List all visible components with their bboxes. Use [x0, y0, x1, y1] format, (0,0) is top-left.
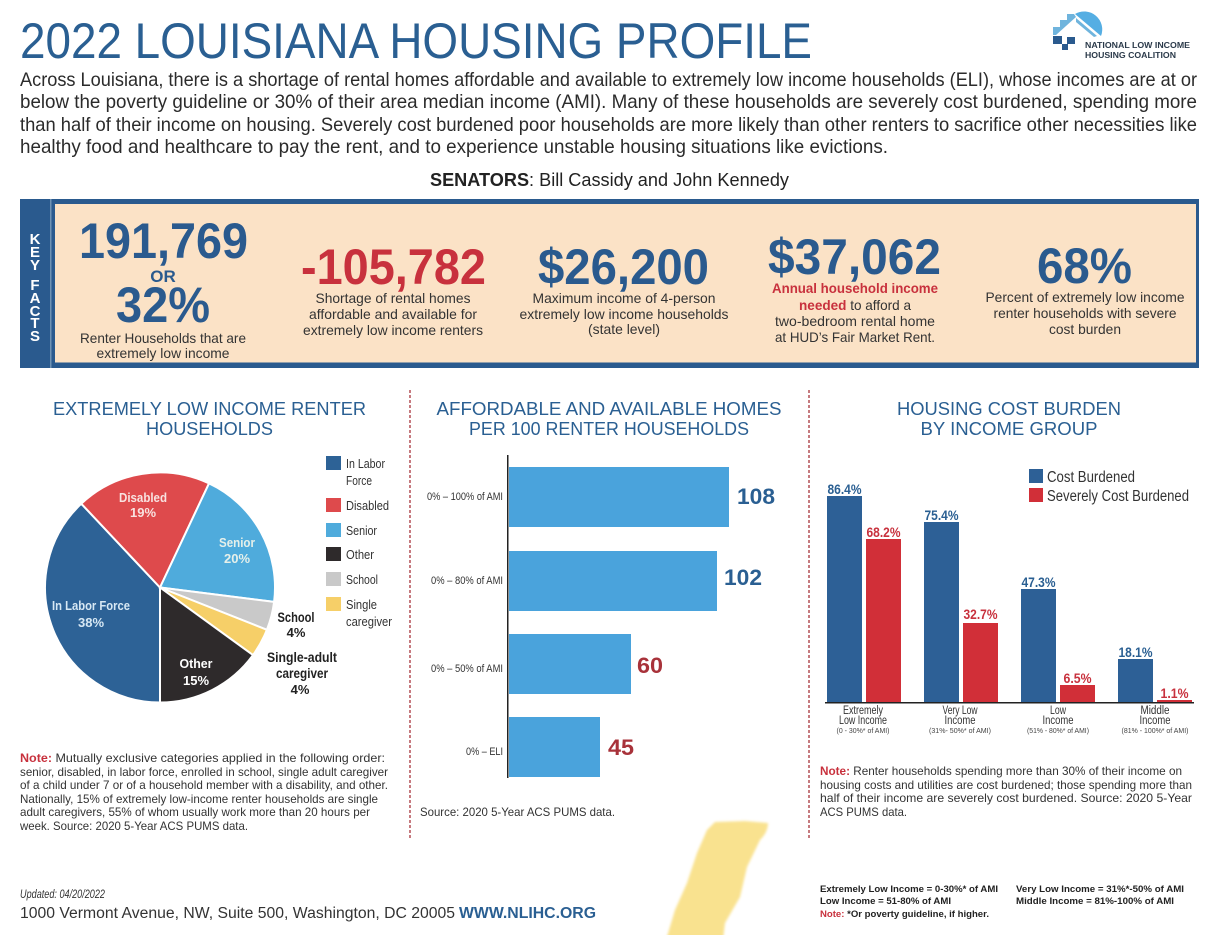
fact: household income needed: $37,062 — [768, 229, 941, 285]
grouped bar chart: cost burden — [825, 481, 1194, 735]
logo: National Low Income Housing Coalition: HOUSING COALITION — [1085, 50, 1176, 60]
fact: household income needed: Annual household income — [772, 280, 938, 296]
grouped bar chart: cost burden: 47.3% — [1022, 574, 1056, 590]
pie labels: Senior — [219, 535, 255, 550]
heading: housing cost burden: BY INCOME GROUP — [920, 418, 1098, 439]
fact: renter households: OR — [150, 267, 176, 286]
key facts side label: S — [30, 328, 40, 345]
grouped bar chart: cost burden: (81% - 100%* of AMI) — [1122, 726, 1189, 735]
grouped bar chart: cost burden: 18.1% — [1118, 644, 1153, 660]
grouped bar chart: cost burden: 75.4% — [924, 507, 959, 523]
pie legend: In Labor — [346, 456, 386, 471]
bar chart: homes per 100 renter households: 0% – 50% of AMI — [431, 663, 503, 675]
fact: severe cost burden: Percent of extremely low income — [986, 289, 1185, 305]
senators line: SENATORS: Bill Cassidy and John Kennedy — [430, 170, 789, 190]
grouped bar chart: cost burden: Extremely — [843, 705, 883, 717]
heading: affordable and available homes — [436, 398, 782, 439]
fact: renter households: extremely low income — [96, 345, 230, 361]
note: pie chart: week. Source: 2020 5-Year ACS PUMS data. — [19, 819, 248, 833]
pie labels: 38% — [78, 615, 104, 630]
pie legend: Disabled — [346, 498, 389, 513]
key facts side label: K — [30, 231, 41, 248]
fact: renter households: 32% — [116, 277, 210, 333]
pie legend: caregiver — [346, 614, 393, 629]
grouped bar chart: cost burden: 68.2% — [866, 524, 901, 540]
fact: maximum income: (state level) — [588, 321, 660, 337]
fact: renter households: Renter Households that are — [80, 330, 246, 346]
footer: income definitions: Low Income = 51-80% of AMI — [820, 896, 951, 907]
key facts side label: E — [30, 244, 40, 261]
key facts side label: T — [30, 315, 40, 332]
intro paragraph: healthy food and healthcare to pay the rent, and to experience unstable housing situations like evictions. — [20, 136, 888, 158]
fact: shortage: extremely low income renters — [303, 322, 483, 338]
fact: shortage: Shortage of rental homes — [316, 290, 470, 306]
pie labels: Disabled — [119, 490, 167, 505]
note: pie chart: of a child under 7 or of a household member with a disability, and other. — [20, 778, 388, 792]
note: pie chart: adult caregivers, 55% of whom usually work more than 20 hours per — [20, 805, 370, 819]
panel: key facts — [20, 199, 1199, 368]
fact: maximum income — [520, 239, 728, 337]
grouped bar chart: cost burden: Middle — [1140, 705, 1170, 717]
grouped bar chart: cost burden: Very Low — [942, 705, 978, 717]
heading: affordable and available homes: AFFORDABLE AND AVAILABLE HOMES — [436, 398, 782, 419]
pie labels: Single-adult — [267, 649, 337, 665]
footer: address: WWW.NLIHC.ORG — [459, 905, 596, 922]
grouped bar chart: cost burden: (31%- 50%* of AMI) — [929, 726, 991, 735]
bar chart: homes per 100 renter households: 108 — [737, 484, 775, 509]
bar chart: homes per 100 renter households — [427, 455, 775, 778]
legend: cost burden: Cost Burdened — [1047, 469, 1135, 486]
heading: extremely low income renter households: EXTREMELY LOW INCOME RENTER — [53, 398, 366, 419]
note: pie chart: Note: Mutually exclusive categories applied in the following order: — [20, 751, 385, 765]
grouped bar chart: cost burden: 1.1% — [1160, 685, 1189, 701]
pie labels: 19% — [130, 505, 156, 520]
pie legend: Single — [346, 597, 377, 612]
heading: housing cost burden — [897, 398, 1121, 439]
fact: severe cost burden: renter households with severe — [994, 305, 1177, 321]
legend: cost burden: Severely Cost Burdened — [1047, 488, 1189, 505]
pie labels: caregiver — [276, 665, 328, 681]
key facts side label: A — [30, 290, 41, 307]
note: pie chart: Nationally, 15% of extremely low-income renter households are single — [20, 792, 378, 806]
note: cost burden: housing costs and utilities are cost burdened; those spending more than — [820, 778, 1192, 792]
footer: updated date: Updated: 04/20/2022 — [20, 889, 105, 901]
grouped bar chart: cost burden: Income — [944, 715, 976, 727]
heading: extremely low income renter households: HOUSEHOLDS — [146, 418, 273, 439]
fact: maximum income: $26,200 — [538, 239, 709, 295]
pie legend: Senior — [346, 523, 378, 538]
intro paragraph — [20, 69, 1197, 158]
key facts side label — [30, 231, 41, 345]
bar chart: homes per 100 renter households: 0% – 80% of AMI — [431, 575, 503, 587]
fact: household income needed — [768, 229, 941, 345]
pie labels: School — [278, 609, 314, 625]
note: pie chart: senior, disabled, in labor force, enrolled in school, single adult caregiver — [20, 765, 388, 779]
fact: severe cost burden — [986, 238, 1185, 337]
fact: household income needed: at HUD’s Fair Market Rent. — [775, 329, 935, 345]
grouped bar chart: cost burden: (51% - 80%* of AMI) — [1027, 726, 1089, 735]
bar chart: homes per 100 renter households: 0% – 100% of AMI — [427, 491, 503, 503]
pie labels: Other — [180, 656, 212, 671]
pie labels: 20% — [224, 551, 250, 566]
footer: income definitions — [820, 884, 1184, 920]
bar chart: homes per 100 renter households: 102 — [724, 565, 762, 590]
note: pie chart — [19, 751, 388, 833]
grouped bar chart: cost burden: 6.5% — [1064, 670, 1092, 686]
grouped bar chart: cost burden: Low Income — [839, 715, 887, 727]
note: cost burden: Note: Renter households spending more than 30% of their income on — [820, 764, 1182, 778]
grouped bar chart: cost burden: 86.4% — [828, 481, 862, 497]
logo: National Low Income Housing Coalition — [1053, 11, 1190, 60]
logo: National Low Income Housing Coalition: NATIONAL LOW INCOME — [1085, 40, 1190, 50]
pie labels — [52, 490, 337, 697]
pie legend: School — [346, 572, 378, 587]
footer: income definitions: Very Low Income = 31%*-50% of AMI — [1016, 884, 1184, 895]
fact: renter households: 191,769 — [79, 213, 248, 269]
pie chart — [45, 472, 275, 702]
heading: housing cost burden: HOUSING COST BURDEN — [897, 398, 1121, 419]
fact: severe cost burden: 68% — [1037, 238, 1132, 294]
grouped bar chart: cost burden: (0 - 30%* of AMI) — [836, 726, 890, 735]
key facts side label: C — [30, 303, 41, 320]
note: cost burden — [820, 764, 1192, 819]
fact: household income needed: two-bedroom rental home — [775, 313, 935, 329]
footer: address: 1000 Vermont Avenue, NW, Suite 500, Washington, DC 20005 — [20, 905, 455, 922]
key facts side label: Y — [30, 257, 40, 274]
fact: shortage — [301, 239, 486, 338]
bar chart: homes per 100 renter households: 45 — [608, 735, 634, 760]
fact: shortage: affordable and available for — [309, 306, 477, 322]
pie legend — [326, 456, 393, 629]
grouped bar chart: cost burden: Income — [1140, 715, 1170, 727]
footer: income definitions: Note: *Or poverty guideline, if higher. — [820, 909, 989, 920]
fact: maximum income: Maximum income of 4-person — [532, 290, 716, 306]
note: cost burden: half of their income are severely cost burdened. Source: 2020 5-Year — [820, 791, 1192, 805]
yellow smear — [666, 821, 768, 935]
grouped bar chart: cost burden: Low — [1050, 705, 1067, 717]
title: 2022 LOUISIANA HOUSING PROFILE — [20, 13, 812, 69]
fact: severe cost burden: cost burden — [1049, 321, 1121, 337]
fact: shortage: -105,782 — [301, 239, 486, 295]
pie labels: In Labor Force — [52, 598, 130, 613]
pie labels: 4% — [287, 625, 306, 640]
pie labels: 15% — [183, 673, 209, 688]
pie legend: Force — [346, 473, 372, 488]
fact: maximum income: extremely low income households — [520, 306, 728, 322]
bar chart: homes per 100 renter households: 0% – ELI — [466, 746, 503, 758]
heading: extremely low income renter households — [53, 398, 366, 439]
bar chart: homes per 100 renter households: 60 — [637, 653, 663, 678]
grouped bar chart: cost burden: 32.7% — [964, 606, 998, 622]
source: bar chart: Source: 2020 5-Year ACS PUMS data. — [420, 805, 615, 819]
fact: renter households — [79, 213, 248, 361]
grouped bar chart: cost burden: Income — [1042, 715, 1074, 727]
legend: cost burden — [1029, 469, 1189, 505]
fact: household income needed: needed to afford a — [799, 297, 911, 313]
footer: income definitions: Middle Income = 81%-100% of AMI — [1016, 896, 1174, 907]
intro paragraph: below the poverty guideline or 30% of their area median income (AMI). Many of these households are severely cost burdened, spending more — [20, 91, 1197, 113]
pie legend: Other — [346, 547, 375, 562]
key facts side label: F — [30, 277, 40, 294]
footer: income definitions: Extremely Low Income = 0-30%* of AMI — [820, 884, 998, 895]
heading: affordable and available homes: PER 100 RENTER HOUSEHOLDS — [469, 418, 749, 439]
note: cost burden: ACS PUMS data. — [820, 805, 907, 819]
pie labels: 4% — [291, 682, 310, 697]
